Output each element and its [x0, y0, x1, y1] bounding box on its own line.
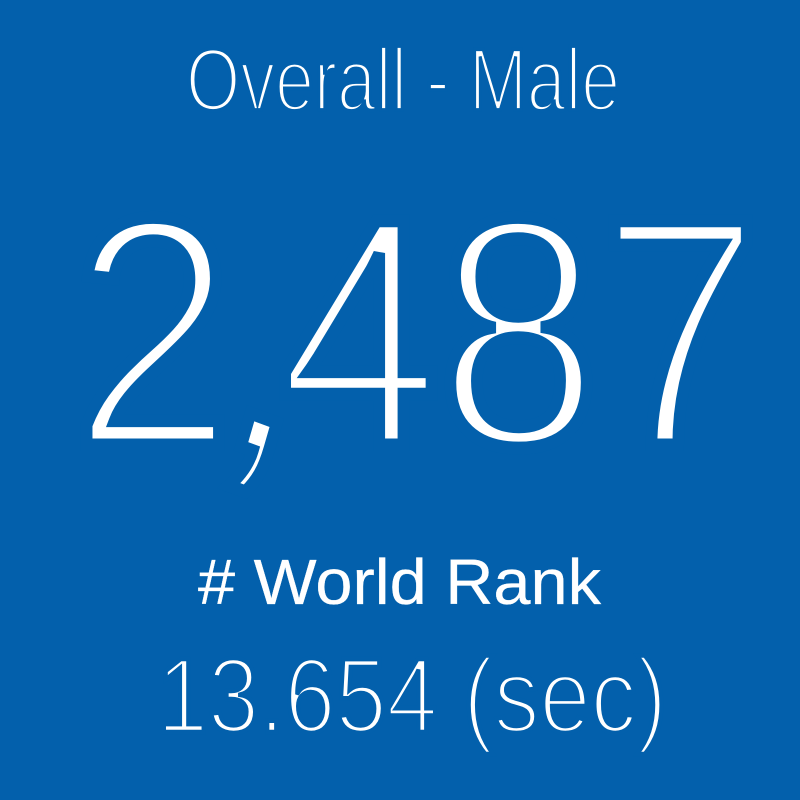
- main number: 2,487: [72, 151, 761, 531]
- label: world rank: # World Rank: [198, 546, 602, 618]
- title: Overall - Male: [186, 30, 620, 129]
- time value: 13.654 (sec): [157, 637, 667, 755]
